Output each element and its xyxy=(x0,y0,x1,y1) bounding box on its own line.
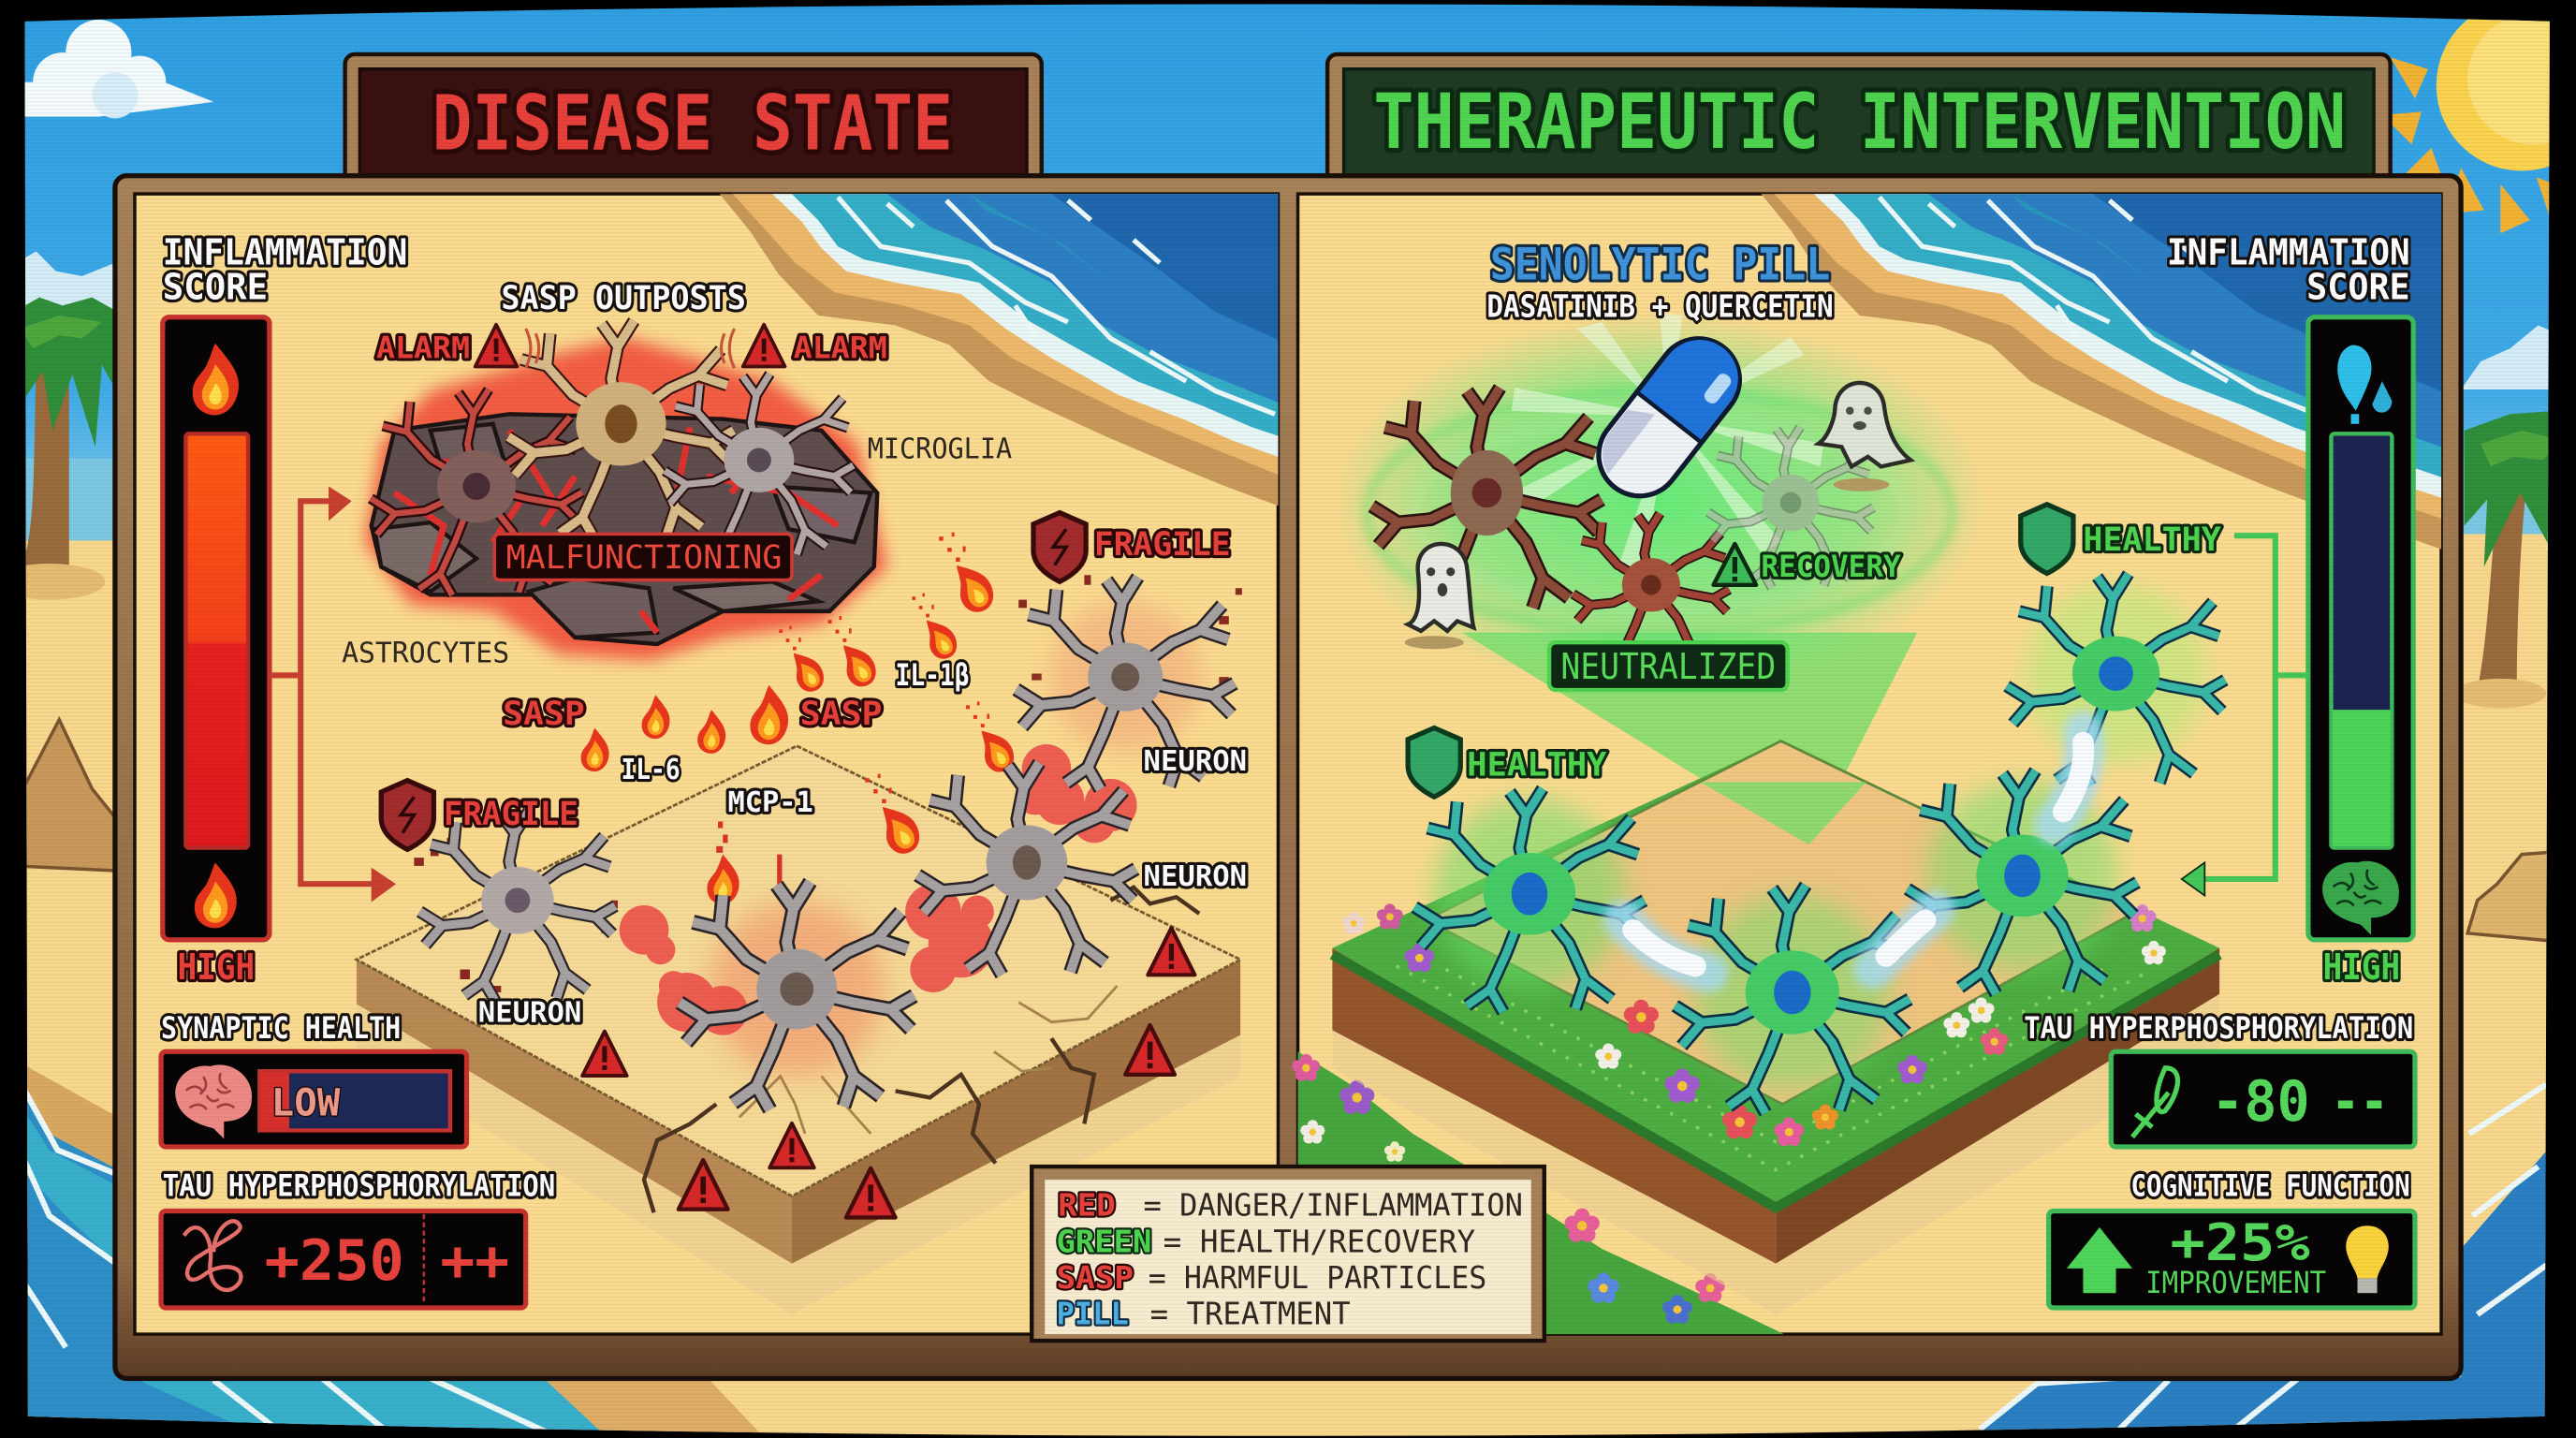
ocean corner xyxy=(719,194,1279,506)
SASP label right: SASP xyxy=(800,695,883,733)
tangled tau icon xyxy=(184,1221,241,1290)
tau card left xyxy=(161,1211,526,1308)
improvement label: IMPROVEMENT xyxy=(2145,1267,2326,1300)
high label: HIGH xyxy=(178,946,255,989)
low gauge: LOW xyxy=(271,1081,341,1125)
recovery label xyxy=(1714,544,1901,585)
ghost lower left xyxy=(1408,544,1473,631)
synapse glow links xyxy=(1623,731,2085,973)
ocean bottom-right xyxy=(1983,1152,2546,1431)
patch flowers xyxy=(1292,1054,1725,1324)
senolytic pill title: SENOLYTIC PILL xyxy=(1490,239,1830,290)
synaptic health card xyxy=(161,1051,466,1147)
light bulb xyxy=(2346,1225,2389,1293)
healthy neuron left xyxy=(1414,788,1645,1012)
heading: disease state: DISEASE STATE xyxy=(432,81,953,169)
grass patch left of legend xyxy=(1298,1051,1479,1173)
-- trend: -- xyxy=(2331,1070,2389,1135)
heading: therapeutic intervention: THERAPEUTIC INTERVENTION xyxy=(1373,79,2346,167)
cloud top left xyxy=(24,20,213,118)
legend row: sasp: SASP xyxy=(1057,1259,1134,1296)
capsule pill xyxy=(1582,322,1756,512)
up arrow xyxy=(2067,1227,2132,1293)
healthy label left xyxy=(1408,727,1606,797)
healthy label top xyxy=(2021,505,2221,574)
brain icon xyxy=(175,1064,252,1138)
grass patch right of legend xyxy=(1546,1212,1784,1334)
ghost shadow upper right xyxy=(1834,478,1889,492)
inflammation score label right: INFLAMMATION xyxy=(2167,232,2410,274)
panel: disease state xyxy=(133,192,1281,1336)
tau card right xyxy=(2111,1051,2415,1147)
faded grey neuron xyxy=(1708,427,1873,588)
tab: disease state xyxy=(345,54,1042,185)
warning triangles xyxy=(582,928,1194,1217)
right palm tree xyxy=(2464,411,2548,680)
ocean corner xyxy=(1762,194,2441,549)
isometric grass platform xyxy=(1332,741,2219,1314)
legend row: pill: = TREATMENT xyxy=(1150,1296,1351,1332)
red veins xyxy=(394,427,838,633)
SASP label left: SASP xyxy=(503,695,585,733)
inflammation score label: SCORE xyxy=(163,266,268,308)
MCP-1 label: MCP-1 xyxy=(728,786,813,819)
inflammation score label right xyxy=(2167,232,2410,308)
cell: grey astrocyte xyxy=(665,374,854,557)
IL-1 beta label: IL-1β xyxy=(896,659,970,693)
inflammatory puffs xyxy=(620,744,1137,1035)
legend row: red: RED xyxy=(1058,1187,1116,1224)
dying brown neuron xyxy=(1372,388,1602,611)
healthy label left: HEALTHY xyxy=(1467,745,1606,784)
background sea band left xyxy=(25,459,112,541)
right sand rock xyxy=(2466,850,2547,942)
legend box xyxy=(1032,1167,1544,1341)
left sand rock xyxy=(26,715,112,873)
neuron: left fragile xyxy=(419,811,615,1001)
+25% value: +25% xyxy=(2170,1213,2310,1272)
neuron: top right fragile xyxy=(1017,577,1235,789)
rock stones xyxy=(372,414,877,644)
teal shallows bottom-left xyxy=(20,1104,611,1430)
low gauge xyxy=(259,1071,450,1130)
green light beam xyxy=(1462,633,1917,844)
fragile badge right xyxy=(1033,513,1231,581)
isometric cracked platform xyxy=(357,746,1240,1314)
divider and ++ xyxy=(424,1214,509,1304)
chain icon xyxy=(2132,1068,2177,1137)
neuron label bottom: NEURON xyxy=(478,997,581,1030)
fragile badge left xyxy=(381,781,578,849)
cognitive function card xyxy=(2049,1211,2415,1308)
healing glow around pill xyxy=(1331,312,1988,694)
alarm left: ALARM xyxy=(376,332,470,366)
flame bottom xyxy=(195,862,237,928)
tau label left: TAU HYPERPHOSPHORYLATION xyxy=(163,1170,555,1204)
healthy neuron centre xyxy=(1675,885,1910,1113)
fragile badge right: FRAGILE xyxy=(1094,525,1231,564)
inflammation score label right: SCORE xyxy=(2306,266,2410,308)
ghost shadow lower left xyxy=(1405,636,1464,649)
SASP particle flames xyxy=(581,533,1021,904)
legend row: pill: PILL xyxy=(1057,1296,1129,1332)
+250 value: +250 xyxy=(265,1229,404,1294)
divider and ++: ++ xyxy=(440,1229,509,1294)
left palm tree xyxy=(25,298,112,579)
legend row: green: = HEALTH/RECOVERY xyxy=(1164,1223,1475,1259)
cloud left behind panel xyxy=(24,251,112,313)
recovery label: RECOVERY xyxy=(1761,550,1901,584)
cognitive function label: COGNITIVE FUNCTION xyxy=(2130,1170,2410,1204)
inflammation score label: INFLAMMATION xyxy=(163,232,407,274)
legend row: green: GREEN xyxy=(1057,1223,1151,1259)
right palm shadow on sand xyxy=(2454,679,2546,708)
water drops xyxy=(2337,345,2392,424)
neutralized badge: NEUTRALIZED xyxy=(1560,646,1776,688)
IL-6 label: IL-6 xyxy=(621,754,681,786)
microglia label: MICROGLIA xyxy=(868,433,1012,466)
neuron label top: NEURON xyxy=(1144,745,1247,778)
synaptic health label: SYNAPTIC HEALTH xyxy=(161,1012,401,1046)
rock mass with neurons xyxy=(365,321,887,661)
cloud right behind panel xyxy=(2464,326,2549,389)
dying red neuron xyxy=(1573,513,1729,666)
ocean bottom-left xyxy=(27,1097,621,1431)
healthy neuron top xyxy=(2007,574,2225,786)
flame top xyxy=(193,344,239,415)
tab: therapeutic intervention xyxy=(1327,54,2391,185)
inflammation gauge xyxy=(163,317,270,940)
green brain xyxy=(2322,861,2399,935)
background sea band right xyxy=(2464,459,2548,534)
cell: dark red astrocyte xyxy=(371,389,582,595)
alarm right xyxy=(722,325,887,368)
tau label right: TAU HYPERPHOSPHORYLATION xyxy=(2024,1012,2413,1046)
legend row: pill xyxy=(1057,1296,1351,1332)
healthy neuron right xyxy=(1908,770,2137,994)
platform flowers xyxy=(1342,903,2166,1146)
shore bottom xyxy=(547,1381,760,1432)
fragile badge left: FRAGILE xyxy=(444,795,578,833)
cell: microglia tan xyxy=(508,321,734,540)
connector arrows right xyxy=(2182,536,2308,895)
recovery gauge xyxy=(2308,317,2413,940)
inflammation score label xyxy=(163,232,407,308)
healthy label top: HEALTHY xyxy=(2083,521,2221,559)
malfunctioning badge: MALFUNCTIONING xyxy=(506,538,782,577)
legend row: red: = DANGER/INFLAMMATION xyxy=(1144,1187,1523,1224)
foam bottom-left xyxy=(20,1088,559,1438)
neuron: right xyxy=(917,763,1136,975)
-80 value: -80 xyxy=(2211,1070,2310,1135)
high label right: HIGH xyxy=(2323,946,2400,989)
astrocytes label: ASTROCYTES xyxy=(342,637,509,669)
ghost upper right xyxy=(1819,383,1910,466)
SASP outposts label: SASP OUTPOSTS xyxy=(501,279,746,317)
sun xyxy=(2391,19,2550,234)
panel: therapeutic intervention xyxy=(1292,194,2487,1334)
alarm left xyxy=(376,325,539,368)
neuron: centre xyxy=(680,882,915,1109)
alarm right: ALARM xyxy=(794,332,887,366)
left palm shadow on sand xyxy=(26,564,105,599)
legend row: sasp: = HARMFUL PARTICLES xyxy=(1149,1259,1486,1296)
wooden panel frame xyxy=(115,176,2461,1378)
left shore band xyxy=(27,1066,112,1419)
debris xyxy=(414,575,1242,992)
neuron label middle: NEURON xyxy=(1144,860,1247,893)
foam bottom-right xyxy=(1980,1084,2546,1430)
drug names: DASATINIB + QUERCETIN xyxy=(1486,288,1834,325)
connector arrows xyxy=(270,486,396,902)
